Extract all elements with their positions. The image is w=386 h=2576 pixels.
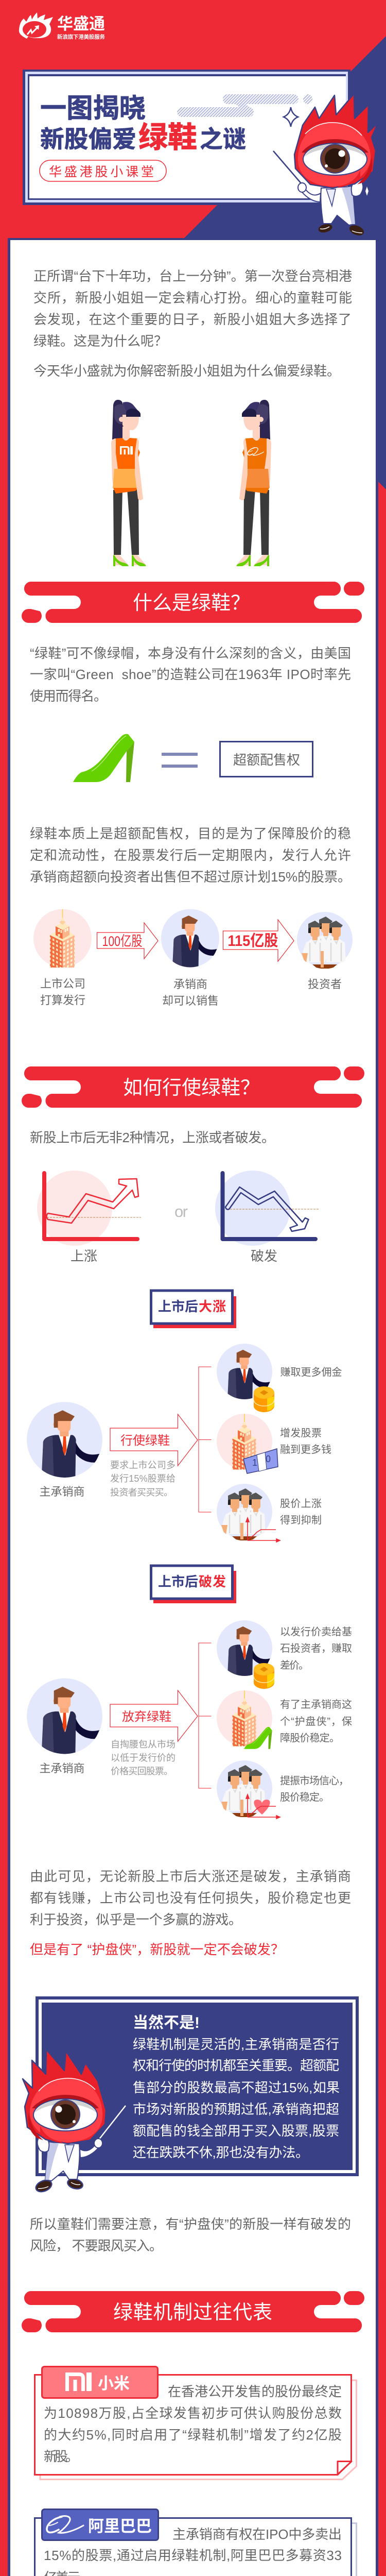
callout: 当然不是 panel: 市场对新股的预期过低,承销商把超 — [133, 2102, 339, 2117]
hero title line two — [40, 121, 246, 154]
arrow: 放弃绿鞋: 放弃绿鞋 — [122, 1710, 171, 1724]
section heading: 如何行使绿鞋: 如何行使绿鞋？ — [123, 1077, 260, 1099]
hero title line two: 新股偏爱 — [40, 126, 136, 152]
paragraph: win-win summary: 由此可见，无论新股上市后大涨还是破发，主承销商 — [30, 1869, 351, 1884]
chart: price rise: 上涨 — [71, 1248, 97, 1264]
tag: 上市后大涨 — [151, 1291, 236, 1328]
hero title line one: 一图揭晓 — [40, 94, 146, 124]
tag: 上市后破发 — [151, 1566, 236, 1603]
diagram: underwriter exercises green shoe — [27, 1402, 102, 1498]
intro paragraph: 绿鞋。这是为什么呢？ — [33, 333, 167, 349]
illustration: woman in Xiaomi top — [111, 400, 146, 566]
callout: 当然不是 panel: 当然不是! — [133, 2014, 200, 2031]
paragraph: caution — [30, 2216, 351, 2253]
section heading: 什么是绿鞋: 什么是绿鞋？ — [133, 592, 250, 614]
callout: 当然不是 panel: 额配售的钱全部用于买入股票,股票 — [133, 2123, 339, 2139]
logo: 华盛通 brand — [19, 12, 105, 40]
outcome: sell to cornerstone investors: 以发行价卖给基 — [280, 1626, 352, 1638]
logo: 华盛通 brand: 新浪旗下港美股服务 — [57, 33, 105, 40]
box: 超额配售权 — [220, 742, 313, 777]
note: 要求上市公司多发行: 要求上市公司多 — [110, 1460, 176, 1470]
arrow: 行使绿鞋 — [110, 1414, 198, 1466]
outcome: issue more shares — [217, 1414, 331, 1473]
outcome: stabilised price: 个“护盘侠”，保 — [280, 1716, 352, 1727]
tag: 上市后破发: 上市后 — [158, 1574, 198, 1589]
flow: listed company — [33, 909, 92, 1007]
flow: underwriter — [161, 909, 219, 1007]
callout: 当然不是 panel: 售部分的股数最高不超过15%,如果 — [133, 2080, 340, 2095]
note: 自掏腰包 — [111, 1739, 176, 1776]
paragraph: win-win summary — [30, 1869, 351, 1927]
label: or: or — [174, 1202, 188, 1221]
arrow: 115亿股 — [223, 920, 294, 961]
card: Xiaomi: 小米 — [98, 2375, 130, 2393]
logo: 华盛通 brand: 华盛通 — [57, 15, 105, 33]
bracket connector — [199, 1643, 211, 1788]
flow: investors — [297, 912, 353, 991]
outcome: sell to cornerstone investors: 石投资者，赚取 — [280, 1642, 352, 1654]
callout: 当然不是 panel: 权和行使的时机都至关重要。超额配 — [133, 2058, 339, 2073]
card: Xiaomi: 在香港公开发售的股份最终定 — [168, 2384, 342, 2399]
illustration: woman in Alibaba top — [236, 400, 271, 566]
intro second paragraph: 今天华小盛就为你解密新股小姐姐为什么偏爱绿鞋。 — [33, 363, 340, 379]
diagram: underwriter exercises green shoe: 主承销商 — [39, 1485, 84, 1498]
outcome: earn more commission: 赚取更多佣金 — [280, 1366, 342, 1378]
card: Alibaba: 主承销商有权在IPO中多卖出 — [172, 2527, 342, 2542]
callout: 当然不是 panel: 绿鞋机制是灵活的,主承销商是否行 — [133, 2037, 339, 2052]
background: red right strip — [378, 482, 386, 2576]
outcome: price rise contained — [217, 1484, 322, 1542]
callout: 当然不是 panel: 还在跌跌不休,那也没有办法。 — [133, 2145, 309, 2160]
icon: sparkle outline — [284, 107, 298, 127]
section heading: 绿鞋机制过往代表: 绿鞋机制过往代表 — [113, 2302, 272, 2324]
outcome: issue more shares: 融到更多钱 — [280, 1444, 331, 1455]
paragraph: origin of green shoe: “绿鞋”可不像绿帽，本身没有什么深刻的含义，由美国 — [30, 646, 351, 661]
outcome: issue more shares: 1 — [252, 1458, 257, 1468]
decorative hatched cloud — [177, 94, 312, 117]
flow: listed company: 打算发行 — [40, 994, 85, 1007]
mascot: pointing at callout — [23, 2049, 126, 2194]
callout: 当然不是 panel — [37, 1998, 357, 2175]
arrow: 行使绿鞋: 行使绿鞋 — [120, 1434, 170, 1448]
red question: 但是有了 “护盘侠”，新股就一定不会破发？ — [30, 1942, 284, 1957]
tag: 上市后大涨: 上市后 — [158, 1299, 198, 1314]
arrow: 115亿股: 115亿股 — [227, 933, 278, 950]
paragraph: caution: 风险， 不要跟风买入。 — [30, 2238, 163, 2253]
card: Alibaba: 15%的股票,通过启用绿鞋机制,阿里巴巴多募资33 — [44, 2548, 342, 2563]
paragraph: nature of green shoe — [30, 826, 351, 885]
section heading: 什么是绿鞋 — [22, 582, 364, 623]
hero title card — [23, 70, 350, 205]
outcome: price rise contained: 股价上涨 — [280, 1498, 322, 1510]
paragraph: nature of green shoe: 绿鞋本质上是超额配售权，目的是为了保障股价的稳 — [30, 826, 351, 841]
paragraph: origin of green shoe: 一家叫“Green shoe”的造鞋公司在1963年 IPO时率先 — [30, 667, 351, 682]
card: Xiaomi: 为10898万股,占全球发售初步可供认购股份总数 — [44, 2405, 342, 2421]
note: 自掏腰包: 以低于发行价的 — [111, 1753, 176, 1763]
note: 自掏腰包: 价格买回股票。 — [111, 1766, 173, 1776]
outcome: market confidence — [217, 1760, 349, 1819]
tag: 上市后大涨: 大涨 — [199, 1299, 226, 1314]
intro paragraph — [33, 268, 352, 349]
flow: listed company: 上市公司 — [40, 977, 85, 990]
icon: green high heel — [73, 734, 134, 782]
mascot: red eye with pointer — [273, 94, 378, 238]
flow: underwriter: 却可以销售 — [162, 994, 219, 1007]
outcome: issue more shares: 增发股票 — [280, 1427, 322, 1439]
intro paragraph: 会发现，在这个重要的日子，新股小姐姐大多选择了 — [33, 312, 352, 327]
paragraph: win-win summary: 利于投资，似乎是一个多赢的游戏。 — [30, 1912, 242, 1927]
outcome: sell to cornerstone investors — [217, 1620, 352, 1689]
bracket connector — [199, 1367, 211, 1512]
arrow: 100亿股 — [97, 923, 158, 959]
equals sign — [162, 753, 198, 768]
section heading: 绿鞋机制过往代表 — [22, 2291, 364, 2332]
hero title line two: 绿鞋 — [138, 121, 197, 154]
badge: 华盛港股小课堂 — [40, 160, 166, 181]
card: Alibaba: 阿里巴巴 — [88, 2517, 152, 2535]
hero title line two: 之谜 — [200, 126, 246, 152]
outcome: earn more commission — [217, 1344, 342, 1412]
note: 自掏腰包: 自掏腰包从市场 — [111, 1739, 176, 1750]
outcome: market confidence: 提振市场信心， — [280, 1775, 349, 1787]
chart: falling below issue price — [215, 1171, 319, 1264]
card: Xiaomi: 的大约5%,同时启用了“绿鞋机制”增发了约2亿股 — [44, 2427, 342, 2443]
intro paragraph: 交所，新股小姐姐一定会精心打扮。细心的童鞋可能 — [33, 290, 352, 306]
paragraph: origin of green shoe: 使用而得名。 — [30, 688, 107, 704]
tag: 上市后破发: 破发 — [199, 1574, 226, 1589]
paragraph: nature of green shoe: 定和流动性，在股票发行后一定期限内，发行人允许 — [30, 848, 351, 863]
note: 要求上市公司多发行: 投资者买买买。 — [110, 1487, 173, 1498]
badge: 华盛港股小课堂: 华盛港股小课堂 — [49, 165, 154, 179]
background: red left strip — [0, 238, 8, 2576]
paragraph: caution: 所以童鞋们需要注意，有“护盘侠”的新股一样有破发的 — [30, 2216, 351, 2232]
text: two scenarios: 新股上市后无非2种情况，上涨或者破发。 — [30, 1130, 275, 1145]
diagram: underwriter gives up green shoe — [27, 1679, 102, 1775]
outcome: stabilised price: 障股价稳定。 — [280, 1732, 340, 1744]
diagram: underwriter gives up green shoe: 主承销商 — [39, 1762, 84, 1775]
box: 超额配售权: 超额配售权 — [233, 752, 300, 768]
outcome: issue more shares: 0 — [266, 1454, 271, 1464]
paragraph: win-win summary: 都有钱赚，上市公司也没有任何损失，股价稳定也更 — [30, 1890, 351, 1906]
outcome: market confidence: 股价稳定。 — [280, 1791, 329, 1803]
chart: price rise — [37, 1171, 141, 1264]
section heading: 如何行使绿鞋 — [22, 1066, 364, 1108]
outcome: stabilised price: 有了主承销商这 — [280, 1699, 352, 1710]
background: red top block with diagonal edge — [0, 0, 386, 238]
paragraph: nature of green shoe: 承销商超额向投资者出售但不超过原计划15%的股票。 — [30, 869, 351, 885]
card: Xiaomi — [35, 2367, 356, 2479]
arrow: 放弃绿鞋 — [110, 1690, 198, 1741]
outcome: stabilised price — [217, 1690, 352, 1749]
note: 要求上市公司多发行: 发行15%股票给 — [110, 1473, 176, 1484]
paragraph: origin of green shoe — [30, 646, 351, 704]
note: 要求上市公司多发行 — [110, 1460, 176, 1498]
arrow: 100亿股: 100亿股 — [102, 934, 142, 949]
chart: falling below issue price: 破发 — [251, 1248, 277, 1264]
card: Alibaba — [35, 2509, 356, 2576]
outcome: sell to cornerstone investors: 差价。 — [280, 1659, 309, 1671]
flow: investors: 投资者 — [308, 978, 342, 991]
intro paragraph: 正所谓“台下十年功，台上一分钟”。第一次登台亮相港 — [33, 268, 352, 284]
flow: underwriter: 承销商 — [173, 978, 207, 991]
card: Xiaomi: 新股。 — [44, 2449, 79, 2464]
outcome: price rise contained: 得到抑制 — [280, 1514, 322, 1526]
